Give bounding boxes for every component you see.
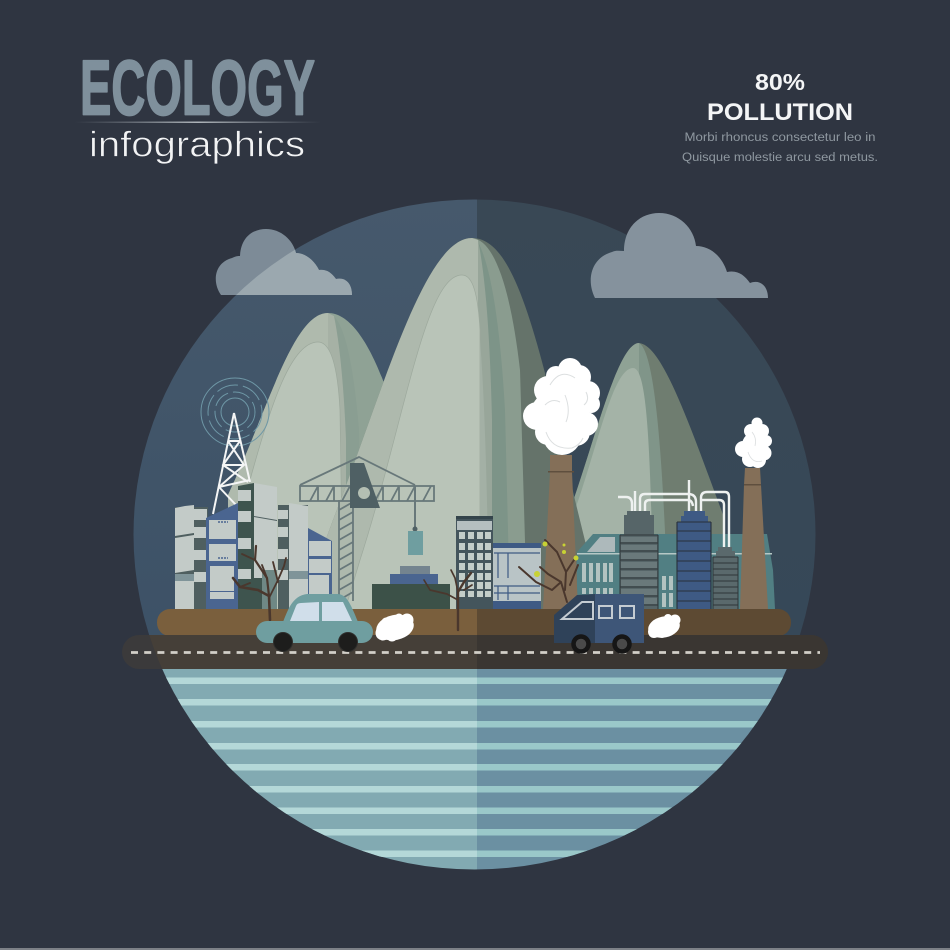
cloud: left — [216, 229, 352, 295]
mountain: right — [570, 343, 725, 610]
car wheels — [274, 632, 358, 652]
building: tall tower centre — [238, 483, 277, 609]
crane cab — [350, 463, 380, 508]
callout: 80% pollution: Quisque molestie arcu sed metus. — [682, 152, 878, 164]
subheading: infographics: infographics — [89, 124, 305, 164]
crane mast — [339, 500, 353, 601]
stat description: Morbi rhoncus consectetur leo in — [684, 132, 876, 144]
stat value: 80% — [755, 69, 805, 95]
truck exhaust cloud — [646, 613, 682, 641]
smoke plume: large — [523, 358, 600, 455]
car windows — [290, 602, 352, 621]
factory pipes — [618, 480, 729, 547]
construction crane — [300, 457, 434, 601]
chimney: large — [543, 455, 578, 609]
building: grey panel block — [493, 543, 541, 609]
truck windows — [562, 602, 634, 619]
car exhaust cloud — [374, 611, 416, 644]
factory hall — [577, 534, 775, 609]
crane jib — [300, 457, 434, 530]
tower lattice — [213, 413, 250, 514]
mountain: centre — [300, 238, 602, 610]
building: office grid tower — [456, 516, 493, 609]
stacked cargo blocks — [372, 566, 450, 609]
chimney: small — [740, 468, 768, 609]
truck wheels — [574, 636, 630, 652]
building: blue block — [206, 503, 238, 609]
bare tree: left — [233, 546, 286, 620]
building: light tower right — [278, 503, 308, 609]
smoke plume: small — [735, 418, 772, 468]
title: ECOLOGY infographics — [75, 44, 321, 164]
bare tree: centre — [424, 570, 472, 630]
road — [122, 635, 828, 669]
water with wave stripes — [162, 669, 787, 870]
heading: ECOLOGY: ECOLOGY — [80, 44, 315, 132]
road markings — [131, 651, 820, 654]
car — [256, 594, 373, 652]
mountain: left — [228, 313, 402, 610]
smokestack tower: grey — [620, 511, 658, 609]
cloud: right — [591, 213, 768, 298]
ground strip — [157, 609, 791, 636]
building: small blue block — [308, 528, 332, 609]
smokestack tower: small grey — [713, 547, 738, 609]
stat label: POLLUTION — [707, 99, 853, 126]
transmission tower with signal rings — [201, 378, 269, 514]
callout: 80% pollution — [682, 69, 878, 164]
sky circle — [130, 195, 822, 675]
signal rings — [201, 378, 269, 446]
crane load — [408, 526, 423, 555]
fruit tree — [519, 540, 578, 602]
delivery truck — [554, 594, 644, 652]
smokestack tower: blue — [677, 511, 711, 609]
building: light tower left — [175, 505, 208, 609]
